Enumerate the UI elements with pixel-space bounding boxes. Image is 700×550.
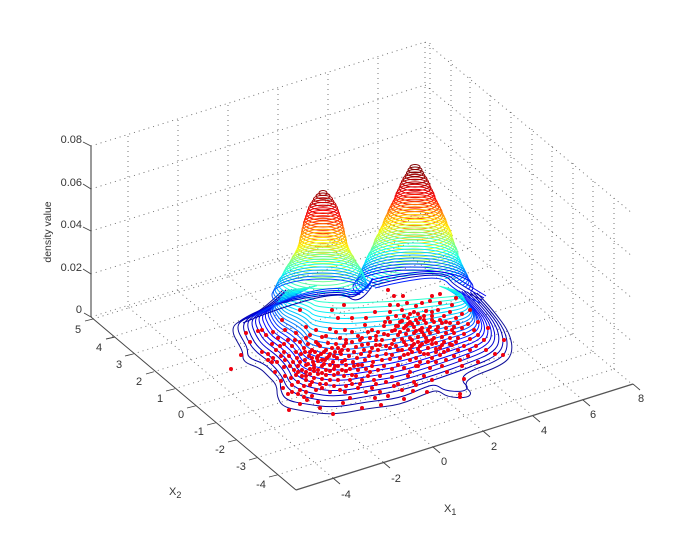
- X2 axis tick labels: 0: [178, 409, 184, 421]
- X2 axis title: X: [169, 486, 176, 498]
- X1 axis tick labels: -4: [341, 489, 351, 501]
- X1 axis title: X: [444, 503, 451, 515]
- 3D density plot: [44, 42, 644, 515]
- density axis labels: 0.06: [61, 177, 82, 189]
- X2 axis tick labels: 3: [116, 359, 122, 371]
- density axis labels: 0.02: [61, 262, 82, 274]
- red sample points: [231, 290, 504, 414]
- X2 axis tick labels: [75, 324, 266, 491]
- density axis labels: [61, 134, 82, 316]
- X2 axis tick labels: -2: [215, 444, 225, 456]
- X2 axis tick labels: 4: [96, 342, 102, 354]
- X1 axis tick labels: 8: [638, 393, 644, 405]
- base contour lines: [233, 286, 512, 414]
- right density peak: [353, 164, 473, 304]
- density axis title: density value: [42, 201, 54, 263]
- X1 axis tick labels: [341, 393, 644, 501]
- blue contour bundles at the saddle: [240, 272, 486, 323]
- X2 axis title: 2: [176, 490, 181, 500]
- X2 axis tick labels: -4: [256, 479, 266, 491]
- axis lines and tick marks: [83, 142, 640, 490]
- density axis labels: 0: [76, 304, 82, 316]
- dotted grid: walls and floor: [91, 42, 632, 478]
- X1 axis tick labels: 6: [590, 409, 596, 421]
- density axis labels: 0.08: [61, 134, 82, 146]
- X2 axis tick labels: 2: [136, 376, 142, 388]
- X2 axis tick labels: 5: [75, 324, 81, 336]
- X1 axis tick labels: 0: [441, 456, 447, 468]
- X2 axis tick labels: -3: [236, 461, 246, 473]
- X1 axis tick labels: -2: [391, 473, 401, 485]
- X2 axis tick labels: -1: [194, 426, 204, 438]
- density axis labels: 0.04: [61, 219, 82, 231]
- X1 axis title: 1: [451, 507, 456, 517]
- X1 axis tick labels: 4: [541, 425, 547, 437]
- X2 axis tick labels: 1: [157, 393, 163, 405]
- left density peak: [272, 190, 372, 311]
- X1 axis tick labels: 2: [491, 441, 497, 453]
